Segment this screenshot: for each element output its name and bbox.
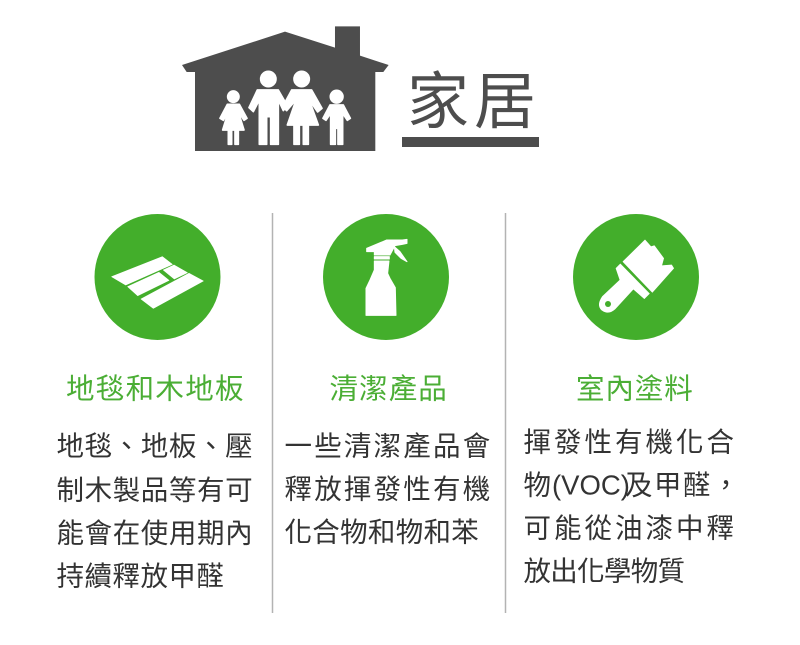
- panel: cleaning products: [284, 214, 492, 548]
- body text: 及甲醛，: [625, 470, 741, 500]
- body text: 物: [524, 470, 551, 500]
- body text: 能會在使用期內: [56, 518, 253, 548]
- icon: paint brush: [573, 214, 699, 340]
- body text: 揮發性有機化合: [524, 426, 737, 458]
- body text: 釋放揮發性有機: [284, 474, 492, 504]
- body text: 地毯、地板、壓: [56, 430, 253, 462]
- title underline: [402, 137, 539, 147]
- body text: [56, 430, 253, 592]
- body text: [284, 430, 492, 548]
- body text: 放出化學物質: [524, 556, 684, 586]
- body text: 化合物和物和苯: [284, 516, 479, 548]
- heading: 清潔產品: [330, 374, 448, 406]
- body text: 一些清潔產品會: [284, 430, 492, 462]
- header: [182, 26, 541, 151]
- heading: 室內塗料: [576, 374, 694, 406]
- body text: (VOC): [552, 470, 630, 500]
- panel: interior paint: [524, 214, 741, 586]
- icon: flooring: [94, 214, 220, 340]
- body text: 持續釋放甲醛: [56, 560, 224, 592]
- body text: 可能從油漆中釋: [524, 512, 737, 544]
- panel: carpets and wood floors: [56, 214, 253, 592]
- body text: 制木製品等有可: [56, 474, 253, 506]
- icon: house with family: [182, 26, 389, 151]
- heading: 地毯和木地板: [66, 374, 245, 406]
- title: 家居: [407, 68, 541, 137]
- body text: [524, 426, 741, 586]
- icon: spray bottle: [323, 214, 449, 340]
